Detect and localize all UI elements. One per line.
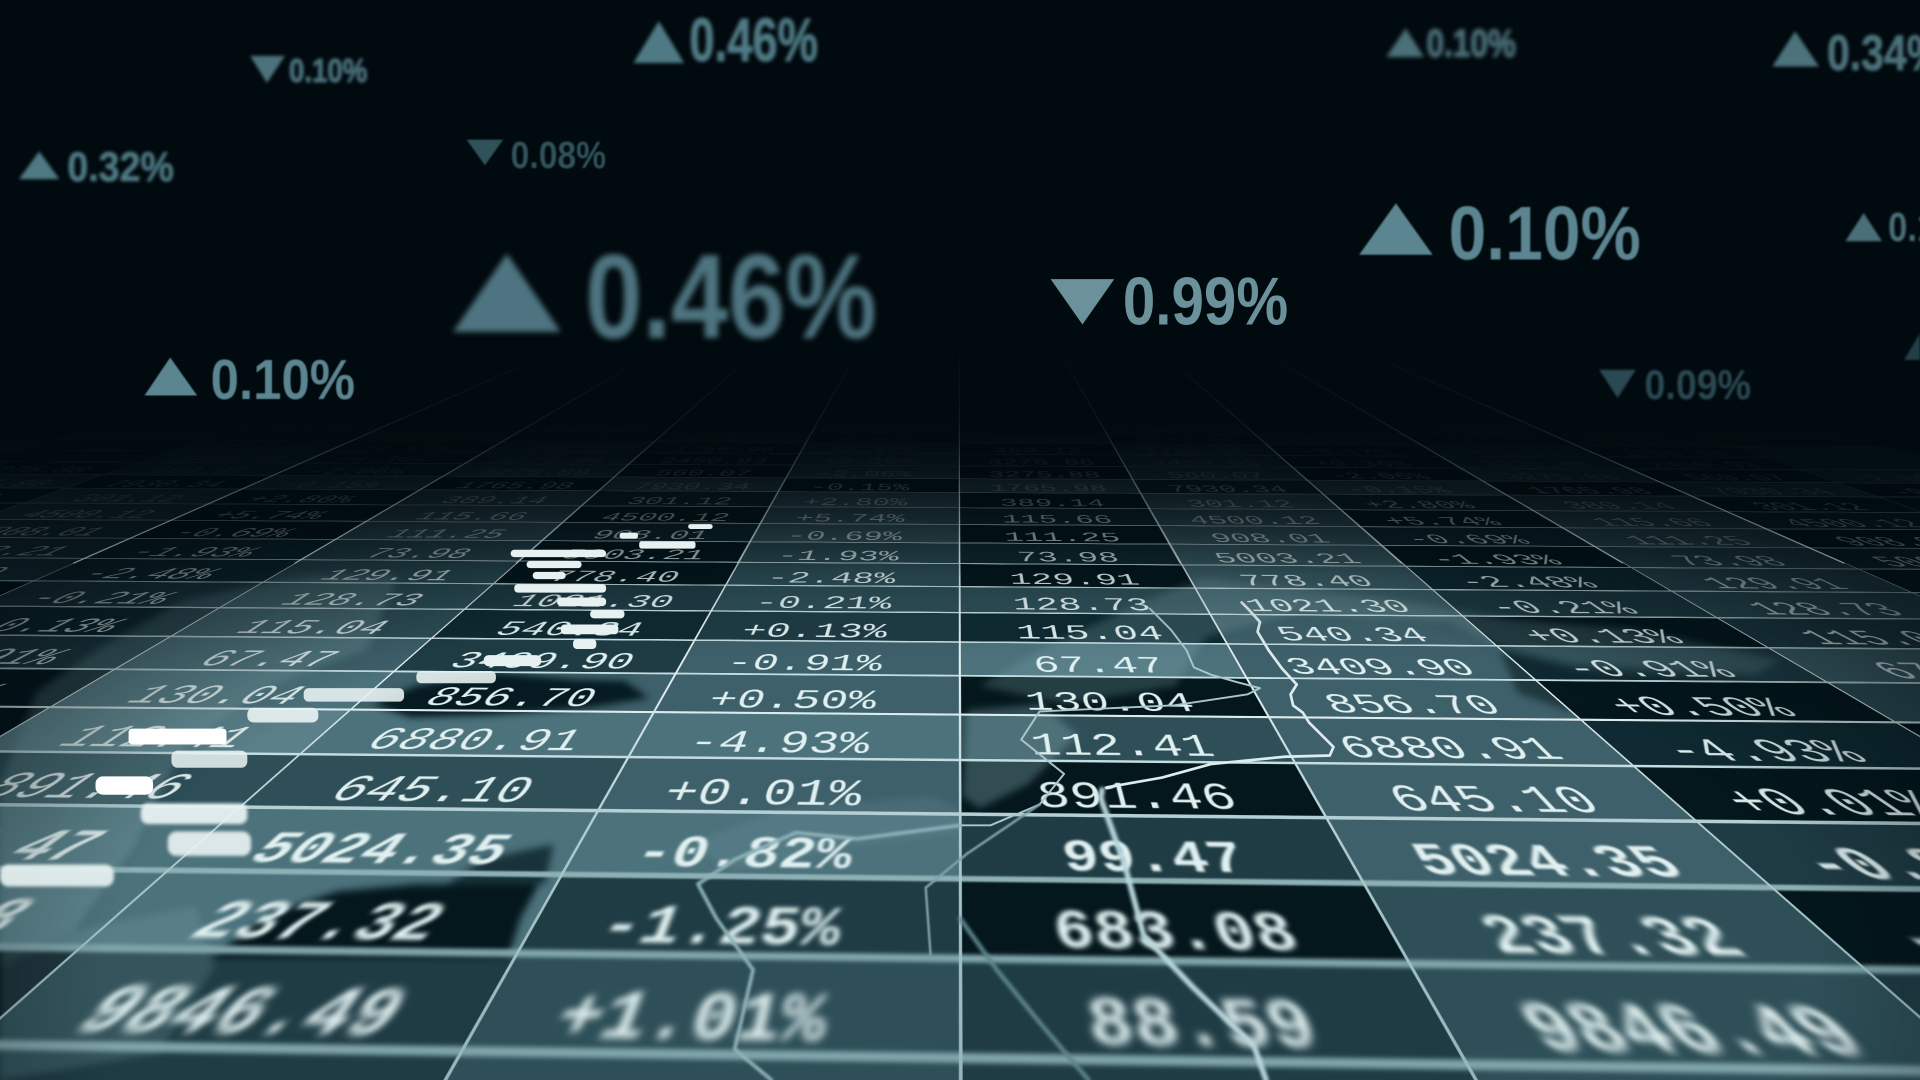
row: 560.07: -2.06% [299,467,413,477]
row: far rows fading to the horizon: 2450.93 [165,454,292,464]
row: 856.70: 856.70 [1317,690,1514,723]
row: far +1.01%: 3276.88 [1587,439,1709,447]
row: 778.40: 129.91 [310,566,462,585]
row: 908.01 [0,525,1920,550]
row: 908.01: -0.69% [160,526,302,541]
row: 856.70: 856.70 [413,683,605,715]
row: 9846.49: +1.01% [538,980,832,1064]
row: 301.12: 301.12 [622,495,735,508]
row: far +1.01%: +1.01% [831,436,918,444]
row: 301.12: +2.80% [236,493,363,506]
row: 5003.21: -1.93% [774,548,900,565]
row: 1021.30 [11,588,1920,621]
row: 645.10: 645.10 [1379,779,1618,825]
row: far +3.17%: +3.17% [1296,448,1397,457]
label: down 0.09%: 0.09% [1644,361,1751,408]
row: 540.34: 115.04 [223,616,399,640]
row: far +3.17%: 1756.98 [668,445,777,454]
row: far +0.64%: 560.07 [1571,429,1673,437]
route: second line lower left [698,825,960,1080]
row: far rows fading to the horizon: 3275.88 [492,455,610,465]
row: far +0.64%: 560.07 [1135,427,1223,435]
row: 5024.35: 5024.35 [1401,836,1705,892]
label: down 0.10% [251,53,367,90]
row: 778.40: -2.48% [1451,573,1608,593]
row: far +1.01%: 560.07 [992,436,1079,445]
row: 5024.35: -0.82% [624,829,856,883]
row: far +3.17% [196,443,1739,458]
label: down 0.09% [1599,361,1751,408]
row: far +3.17%: 1756.98 [196,443,318,452]
row: far rows fading to the horizon [165,454,1772,470]
map: dark landmass in front of the 237.32 row [214,884,539,958]
row: 4500.12: 4500.12 [7,508,165,521]
label: up 0.10% lower left [144,348,355,411]
row: 908.01: -0.69% [783,529,903,544]
row: 1021.30: 128.73 [1738,599,1920,621]
map: dark patch around 856.70 [373,672,649,718]
row: 6880.91 [39,720,1886,772]
row: 301.12: 301.12 [1743,501,1882,514]
row: 5024.35: 5024.35 [230,825,522,879]
row: 237.32: -1.25% [586,897,845,963]
map: light land to the lower left [0,906,214,1080]
panel: perspective table cell shading [0,468,1920,1080]
row: 4500.12: 115.66 [1585,516,1724,530]
label: up 0.10% right: 0.10% [1449,192,1641,277]
row: 1021.30: 128.73 [1012,594,1155,616]
row: far rows fading to the horizon: 2450.93 [1639,460,1772,470]
route: third line lower centre [960,918,1089,1080]
row: 5024.35 [0,822,1920,896]
row: 6880.91: 6880.91 [1331,731,1577,770]
route: bright line, lower blurred section [1101,790,1266,1080]
map: light land at centre right [980,578,1780,704]
row: 301.12: +2.80% [800,496,908,509]
row: 301.12: 389.14 [999,497,1108,510]
row: 301.12: 301.12 [61,493,193,505]
row: far +0.64%: +0.64% [836,426,919,434]
row: 7930.34: 1765.98 [449,480,579,492]
row: far +3.17%: +3.17% [826,446,916,455]
horizontal grid rules [0,452,1920,1079]
row: 778.40: 129.91 [1693,575,1862,594]
row: 5024.35: 99.47 [1059,833,1256,887]
row: far +3.17%: 1756.98 [1141,447,1252,456]
row: 560.07: 560.07 [1676,473,1800,483]
row: 645.10: 891.46 [1034,776,1246,821]
row: 237.32: 237.32 [168,892,458,958]
row: 560.07 [0,465,1920,484]
row: 560.07: 560.07 [651,468,754,479]
row: 856.70: +0.50% [702,685,878,717]
row: 301.12: 389.14 [1556,500,1687,513]
row: 7930.34: 1765.98 [989,483,1109,494]
row: 908.01: 111.25 [1004,530,1123,545]
row: far +0.64%: 2405.03 [1418,428,1530,436]
row: 778.40: 129.91 [1009,570,1143,590]
row: far +0.64%: 560.07 [259,424,358,432]
row: 6880.91: 112.41 [1028,728,1221,766]
label: up 0.10% lower left: 0.10% [211,348,355,411]
row: 4500.12: +5.74% [792,512,906,526]
row: far +3.17%: 450.12 [1462,448,1568,458]
row: 560.07: 3275.88 [471,467,595,478]
row: far +0.64% [223,423,1712,439]
row: 645.10: 645.10 [313,770,544,814]
row: 301.12: 389.14 [433,494,553,507]
row: 237.32: 683.08 [1050,901,1311,969]
row: 540.34 [0,614,1920,652]
row: far +0.64%: 2405.03 [984,427,1081,434]
label: top right up 0.34% [1773,25,1920,81]
row: far +3.17%: 1756.98 [1612,449,1739,458]
row: 778.40: 778.40 [1235,572,1381,591]
label: top up 0.10% [1387,22,1516,65]
row: 856.70: 130.04 [1023,687,1201,720]
row: 560.07: 3275.88 [1497,472,1631,483]
row: 1021.30: -0.21% [11,588,185,609]
row: far rows fading to the horizon: +0.36% [326,455,435,464]
label: down 0.08%: 0.08% [511,135,606,177]
row: far +1.01%: 3276.88 [1134,437,1241,445]
map: dark strip under the 5024.35 row [447,845,553,884]
row: far rows fading to the horizon: 2450.93 [656,456,770,466]
row: 7930.34: 7930.34 [629,481,753,493]
row: 7930.34: 7930.34 [1166,483,1292,495]
row: 5003.21: -1.93% [116,544,267,561]
label: top up 0.46% [634,6,818,74]
label: clipped triangle at right edge [1904,333,1920,360]
row: far rows fading to the horizon: 2450.93 [1149,458,1264,468]
row: 9846.49: 9846.49 [46,975,422,1058]
row: 778.40: 778.40 [542,568,685,587]
row: 908.01: 111.25 [1617,533,1765,549]
row: 3409.90: -0.91% [720,650,884,678]
label: down 0.99% [1051,264,1288,339]
row: 5003.21: 5003.21 [1210,550,1368,568]
row: 908.01: -0.69% [1400,532,1538,548]
row: 560.07: -2.06% [1325,471,1436,482]
row: far rows fading to the horizon: +0.36% [1310,459,1416,469]
row: far +0.64%: +0.64% [397,425,491,432]
label: large up 0.46%: 0.46% [585,230,877,364]
row: 6880.91: 6880.91 [352,723,591,760]
row: 4500.12: 4500.12 [595,511,733,525]
row: 3409.90: 67.47 [184,646,348,674]
row: 1021.30: -0.21% [750,593,893,614]
row: 1021.30: 1021.30 [504,591,679,613]
row: 908.01: 111.25 [378,527,512,542]
label: top up 0.46%: 0.46% [689,6,818,74]
row: 301.12 [0,492,1882,514]
row: 4500.12: 115.66 [1001,513,1115,527]
row: 9846.49 [46,975,1898,1078]
row: 3409.90: 3409.90 [439,648,641,676]
label: up 0.32%: 0.32% [67,143,174,190]
row: 7930.34: -0.15% [808,482,910,493]
row: 3409.90: 67.47 [1032,652,1170,680]
row: 645.10 [0,767,1920,828]
row: 540.34: 115.04 [1015,621,1168,646]
row: 5003.21: -1.93% [1424,552,1571,569]
row: 778.40 [0,564,1862,594]
row: far +3.17%: +3.17% [352,444,455,453]
row: far +1.01%: +1.01% [375,434,474,442]
row: 6880.91: 112.41 [39,720,267,757]
row: 5003.21 [0,543,1920,572]
row: 856.70 [0,678,1920,728]
row: 1021.30: 1021.30 [1241,596,1420,618]
row: 3409.90: 3409.90 [1279,654,1487,683]
route: branch near 112.41 [926,804,1040,955]
map: light land at left [0,576,398,967]
label: down 0.10%: 0.10% [289,53,367,90]
row: 237.32: 237.32 [1467,906,1769,974]
label: up 0.10% right [1359,192,1641,277]
row: 540.34: 540.34 [486,618,650,642]
row: far +0.64%: 560.07 [697,426,784,433]
map: dark shore at right [1500,651,1800,710]
row: 778.40: -2.48% [67,565,229,584]
row: 856.70: 130.04 [110,680,317,712]
row: far +0.64%: +0.64% [1272,428,1364,436]
row: 856.70: +0.50% [1597,692,1813,725]
row: far +1.01%: 560.07 [535,434,629,443]
row: 1021.30: -0.21% [1480,597,1649,619]
row: far rows fading to the horizon: 3275.88 [987,458,1097,467]
row: 6880.91: -4.93% [680,725,872,763]
row: 7930.34 [0,478,1920,499]
row: far +0.64%: 2405.03 [543,425,648,433]
row: 7930.34: -0.15% [269,479,389,491]
row: 7930.34: 7930.34 [93,479,234,490]
row: 3409.90 [0,644,1920,687]
label: right edge up 0.10% [1845,204,1920,250]
row: 4500.12: +5.74% [200,509,334,522]
map: light land at far lower left of centre [686,796,960,869]
row: far +3.17%: 450.12 [518,445,616,453]
row: 9846.49: 9846.49 [1505,992,1898,1078]
row: far +1.01% [195,432,1741,449]
row: far +1.01%: 560.07 [1443,438,1545,446]
row: 7930.34: -0.15% [1341,484,1458,496]
route: second line upper [960,609,1260,825]
row: 5003.21: 5003.21 [555,547,709,564]
vertical grid rules converging on the horizon [0,451,1920,1080]
row: 560.07: 560.07 [138,466,257,476]
row: 645.10: +0.01% [654,773,865,818]
row: 778.40: -2.48% [763,569,897,588]
row: 540.34: +0.13% [736,620,889,644]
row: 4500.12: 115.66 [407,510,534,523]
row: far rows fading to the horizon: 3275.88 [1475,460,1602,470]
row: 5003.21: 73.98 [1663,553,1800,570]
row: 540.34: 540.34 [1271,623,1438,648]
label: up 0.32% [20,143,174,190]
label: down 0.08% [467,135,606,177]
row: 301.12: 301.12 [1184,498,1300,511]
row: 908.01: 908.01 [1207,531,1336,547]
map: light land at centre [962,704,1078,808]
label: down 0.99%: 0.99% [1123,264,1288,339]
row: 237.32 [0,888,1920,980]
row: 3409.90: -0.91% [1553,656,1750,685]
row: 1021.30: 128.73 [269,590,432,611]
row: 6880.91: -4.93% [1648,733,1886,772]
label: large up 0.46% [453,230,877,364]
row: far +1.01%: 3276.88 [226,433,342,441]
row: 5003.21: 73.98 [1016,549,1122,566]
row: 4500.12: +5.74% [1379,515,1509,529]
row: 908.01: 908.01 [586,528,713,543]
row: 540.34: +0.13% [1514,625,1696,650]
row: 4500.12: 4500.12 [1186,514,1326,528]
row: 9846.49: 88.59 [1082,986,1332,1071]
row: far +1.01%: +1.01% [1283,437,1380,446]
row: 7930.34: 7930.34 [1700,486,1848,498]
row: 4500.12 [7,508,1920,531]
route: bright line, upper sharp section [1107,602,1333,787]
row: 7930.34: 1765.98 [1521,485,1662,497]
row: far +3.17%: 450.12 [993,447,1084,455]
row: far +1.01%: 3276.88 [679,435,784,443]
row: far rows fading to the horizon: +0.36% [820,457,914,467]
row: 560.07: -2.06% [814,469,912,479]
row: 560.07: 3275.88 [988,470,1103,480]
row: 301.12: +2.80% [1359,499,1482,512]
label: top up 0.10%: 0.10% [1427,22,1516,65]
panel: table grid lines and figures [0,424,1920,1080]
row: 560.07: 560.07 [1165,470,1270,481]
row: 5003.21: 73.98 [356,546,479,562]
